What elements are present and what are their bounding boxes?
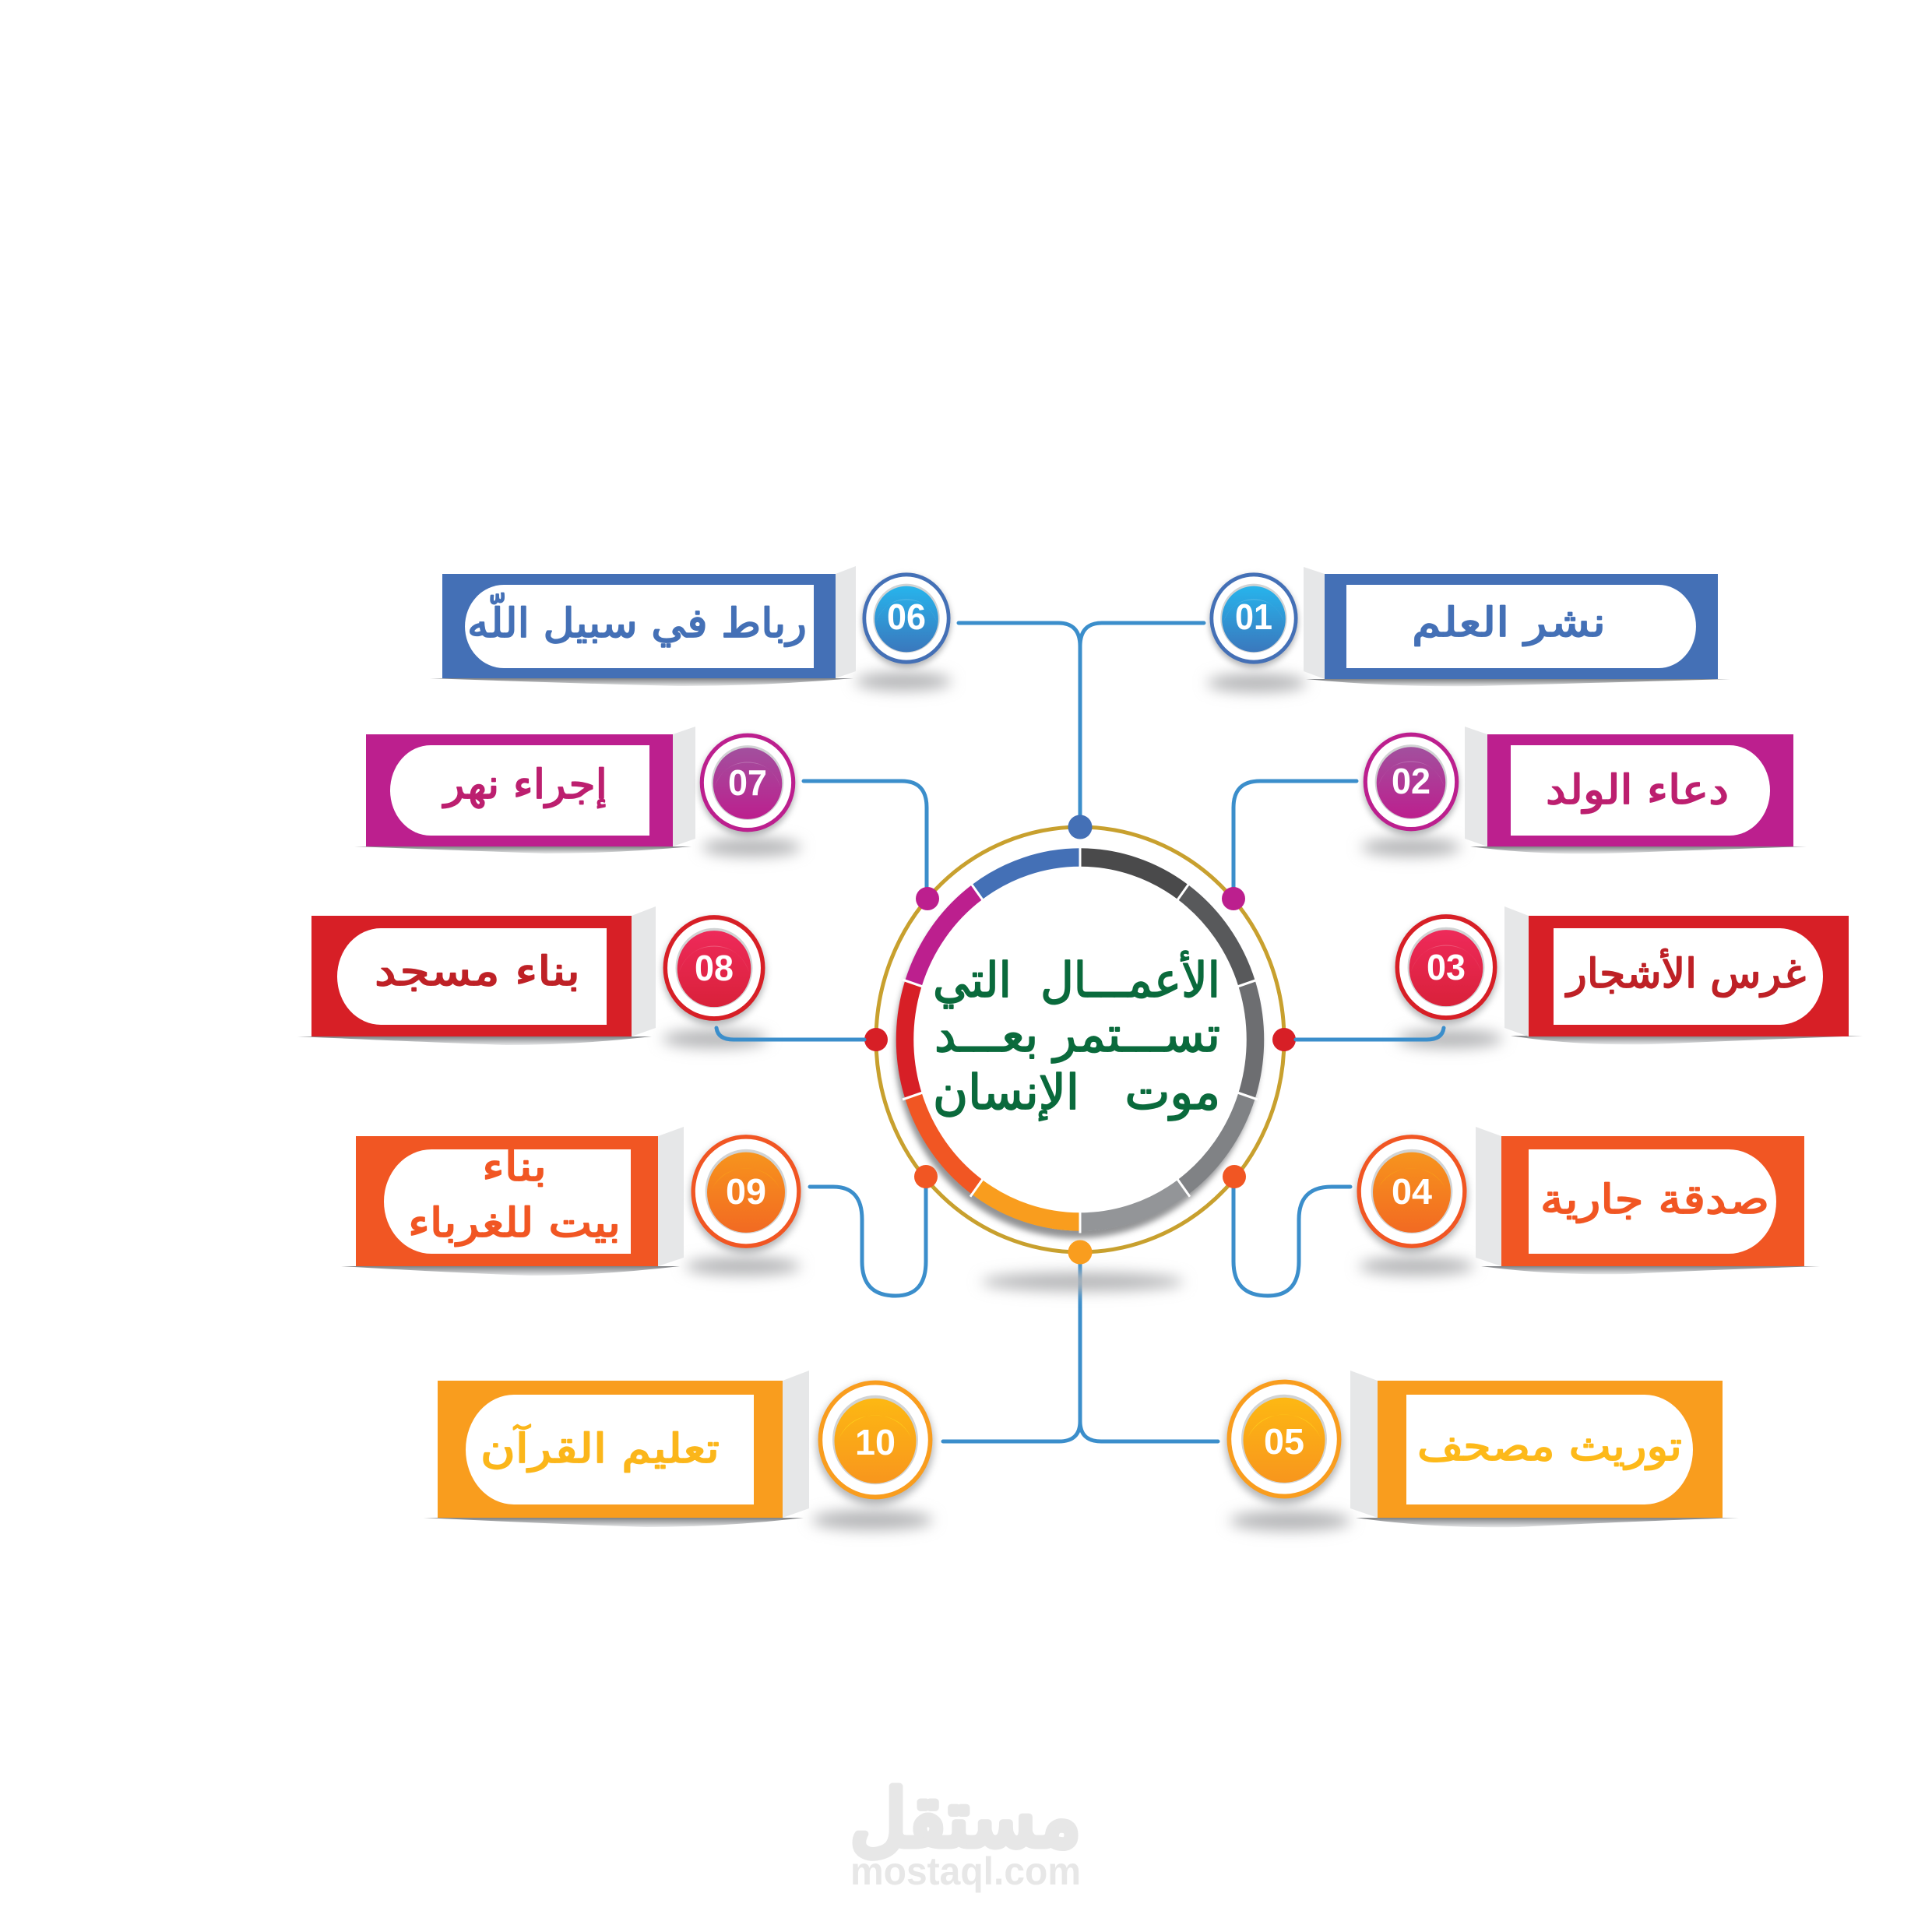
badge 06: 06 — [887, 596, 926, 637]
badge 02 — [1363, 734, 1459, 835]
central title: موت الإنسان — [933, 1064, 1220, 1121]
item 09 — [341, 1127, 801, 1276]
label 08: بناء مسجد — [375, 948, 580, 995]
item 04 — [1357, 1127, 1820, 1276]
item 10 — [424, 1371, 934, 1530]
item 05 — [1226, 1371, 1739, 1531]
label 03: غرس الأشجار — [1564, 948, 1806, 998]
central hub — [864, 815, 1296, 1265]
hub shadow — [895, 857, 1261, 1238]
connector lines 03 and 08 — [716, 1028, 1444, 1040]
label 01: نشر العلم — [1412, 600, 1606, 646]
connector lines — [804, 623, 1357, 1441]
badge 08 — [663, 917, 765, 1025]
badge 01: 01 — [1235, 596, 1272, 637]
badge 08: 08 — [695, 948, 734, 988]
badge 03 — [1395, 917, 1497, 1024]
watermark logo: مستقل — [850, 1773, 1081, 1864]
label 06: رباط في سبيل اللّه — [467, 593, 807, 647]
ring segments — [903, 846, 1258, 1233]
central ground shadow — [981, 1272, 1184, 1291]
badge 10 — [817, 1383, 934, 1504]
ring dots — [864, 815, 1296, 1265]
item 06 — [430, 566, 952, 691]
badge 07: 07 — [728, 762, 767, 803]
gold outer ring — [876, 827, 1284, 1252]
central title — [933, 950, 1220, 1121]
hub disc — [896, 849, 1264, 1230]
badge 05 — [1226, 1382, 1343, 1504]
badge 09: 09 — [726, 1171, 766, 1212]
label 09 — [408, 1144, 621, 1247]
label 10: تعليم القرآن — [480, 1423, 720, 1473]
badge 05: 05 — [1264, 1421, 1304, 1462]
badge 04 — [1357, 1137, 1467, 1253]
badge 03: 03 — [1427, 947, 1466, 987]
badge 07 — [699, 735, 796, 836]
item 07 — [354, 727, 801, 857]
item 01 — [1207, 567, 1730, 692]
item 02 — [1361, 727, 1807, 857]
central title: تســـتمر بعـــد — [934, 1006, 1220, 1063]
watermark logo: mostaql.com — [850, 1849, 1081, 1893]
item 03 — [1395, 906, 1863, 1048]
badge 04: 04 — [1392, 1171, 1432, 1212]
badge 01 — [1209, 575, 1298, 667]
label 02: دعاء الولد — [1546, 767, 1729, 814]
item 08 — [297, 906, 768, 1048]
label 09: بيت للغرباء — [408, 1200, 621, 1247]
label 09: بناء — [482, 1144, 547, 1191]
label 04: صدقة جارية — [1540, 1177, 1769, 1223]
badge 06 — [862, 575, 951, 667]
label 05: توريث مصحف — [1417, 1423, 1682, 1470]
badge 10: 10 — [855, 1422, 896, 1462]
badge 09 — [691, 1137, 801, 1253]
label 07: إجراء نهر — [442, 762, 607, 808]
badge 02: 02 — [1392, 761, 1431, 801]
central title: الأعمـــال التي — [933, 950, 1220, 1008]
